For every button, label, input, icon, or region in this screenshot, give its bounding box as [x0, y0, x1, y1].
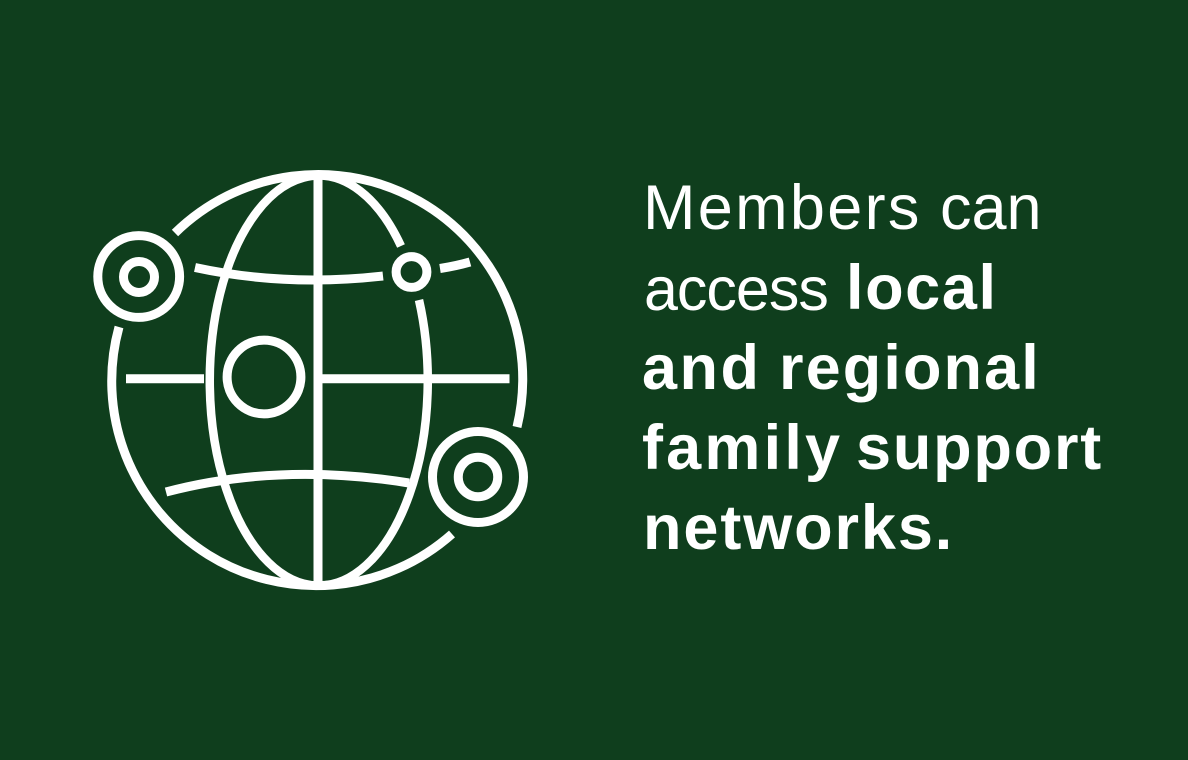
text block: message: regional	[779, 333, 1041, 403]
upper parallel right segment	[440, 262, 470, 268]
equator left segment	[126, 374, 204, 383]
lower parallel	[166, 474, 409, 492]
central meridian	[314, 174, 322, 583]
text block: message: and	[642, 333, 762, 403]
meridian ellipse	[210, 176, 428, 586]
text block: message: local	[846, 253, 998, 323]
equator right segment	[322, 374, 510, 383]
text block: message: networks.	[643, 493, 954, 563]
text block: message: can	[940, 173, 1042, 243]
text block: message	[642, 173, 1103, 563]
globe outline lower arc	[112, 327, 452, 586]
globe outline upper arc	[175, 174, 523, 427]
upper parallel	[195, 268, 383, 280]
text block: message: support	[856, 413, 1103, 483]
marker: center	[227, 340, 301, 414]
text block: message: access	[644, 255, 828, 323]
marker: left	[98, 236, 180, 317]
marker: bottom right	[432, 432, 524, 522]
marker: top right	[396, 257, 427, 287]
text block: message: family	[642, 413, 843, 483]
text block: message: Members	[643, 173, 922, 243]
